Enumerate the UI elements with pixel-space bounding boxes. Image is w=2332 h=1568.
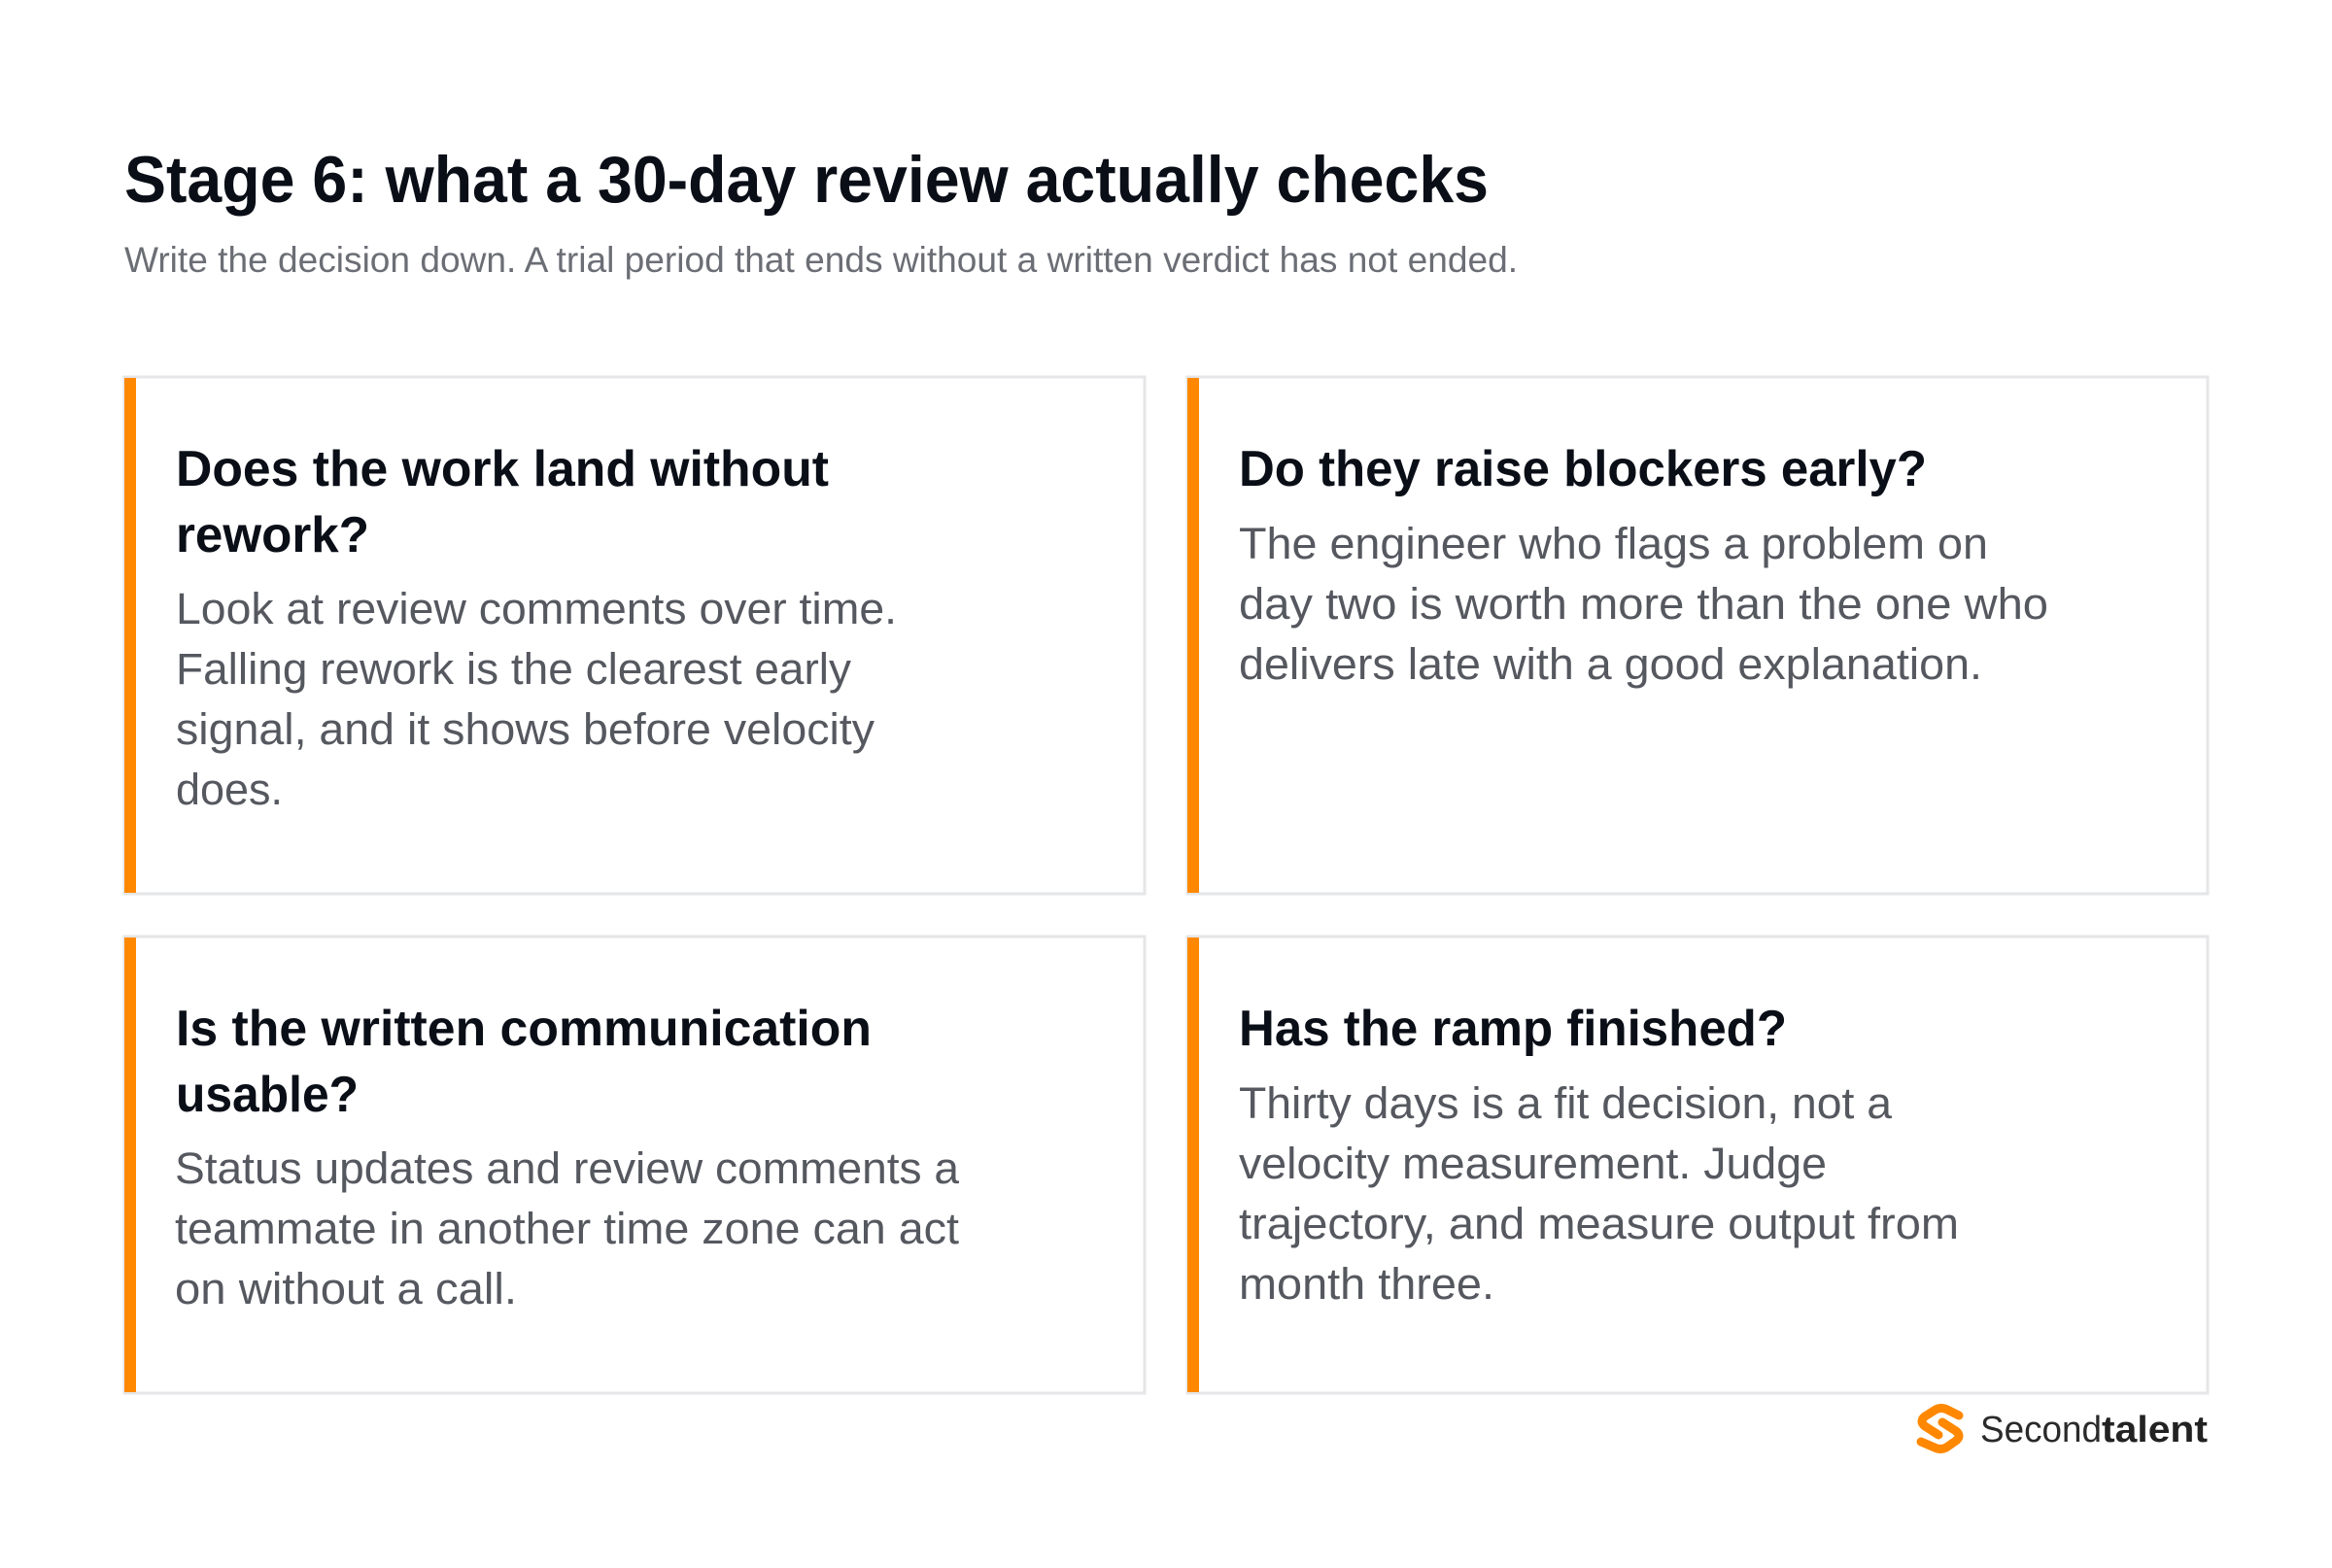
- card heading: [176, 441, 829, 563]
- card body text: [1239, 519, 2048, 689]
- card body text: Thirty days is a fit decision, not a: [1239, 1078, 1893, 1128]
- card body text: month three.: [1239, 1259, 1494, 1309]
- card body text: on without a call.: [175, 1264, 517, 1313]
- card body text: delivers late with a good explanation.: [1239, 639, 1982, 689]
- card body text: Falling rework is the clearest early: [176, 644, 851, 694]
- card body text: Status updates and review comments a: [175, 1143, 960, 1193]
- card body text: day two is worth more than the one who: [1239, 579, 2048, 629]
- logo wordmark: [1980, 1410, 2208, 1450]
- card heading: [176, 1001, 872, 1123]
- logo wordmark: talent: [2102, 1410, 2208, 1450]
- card body text: signal, and it shows before velocity: [176, 704, 875, 754]
- card frame with orange accent: [1187, 377, 2208, 894]
- logo wordmark: Second: [1980, 1410, 2102, 1450]
- panel: does the work land without rework: [124, 377, 1145, 894]
- panel: is the written communication usable: [124, 937, 1145, 1393]
- title: Stage 6: what a 30-day review actually checks: [124, 143, 1489, 217]
- logo: Secondtalent: [1921, 1409, 2208, 1450]
- card body text: [1239, 1078, 1959, 1309]
- card heading: usable?: [176, 1067, 359, 1123]
- card heading: Is the written communication: [176, 1001, 872, 1057]
- card frame with orange accent: [1187, 937, 2208, 1393]
- card heading: rework?: [176, 507, 369, 563]
- card heading: Does the work land without: [176, 441, 829, 497]
- card body text: teammate in another time zone can act: [175, 1204, 960, 1253]
- card body text: trajectory, and measure output from: [1239, 1199, 1959, 1248]
- card heading: Do they raise blockers early?: [1239, 441, 1927, 497]
- card body text: Look at review comments over time.: [176, 584, 897, 633]
- icon: orange S mark: [1921, 1409, 1959, 1449]
- card body text: does.: [176, 765, 283, 814]
- card body text: [176, 584, 897, 814]
- card body text: [175, 1143, 960, 1313]
- card frame with orange accent: [124, 937, 1145, 1393]
- panel: has the ramp finished: [1187, 937, 2208, 1393]
- card body text: The engineer who flags a problem on: [1239, 519, 1988, 568]
- card frame with orange accent: [124, 377, 1145, 894]
- subtitle: Write the decision down. A trial period that ends without a written verdict has not ended.: [124, 240, 1518, 280]
- panel: do they raise blockers early: [1187, 377, 2208, 894]
- card body text: velocity measurement. Judge: [1239, 1139, 1827, 1188]
- card heading: Has the ramp finished?: [1239, 1001, 1787, 1057]
